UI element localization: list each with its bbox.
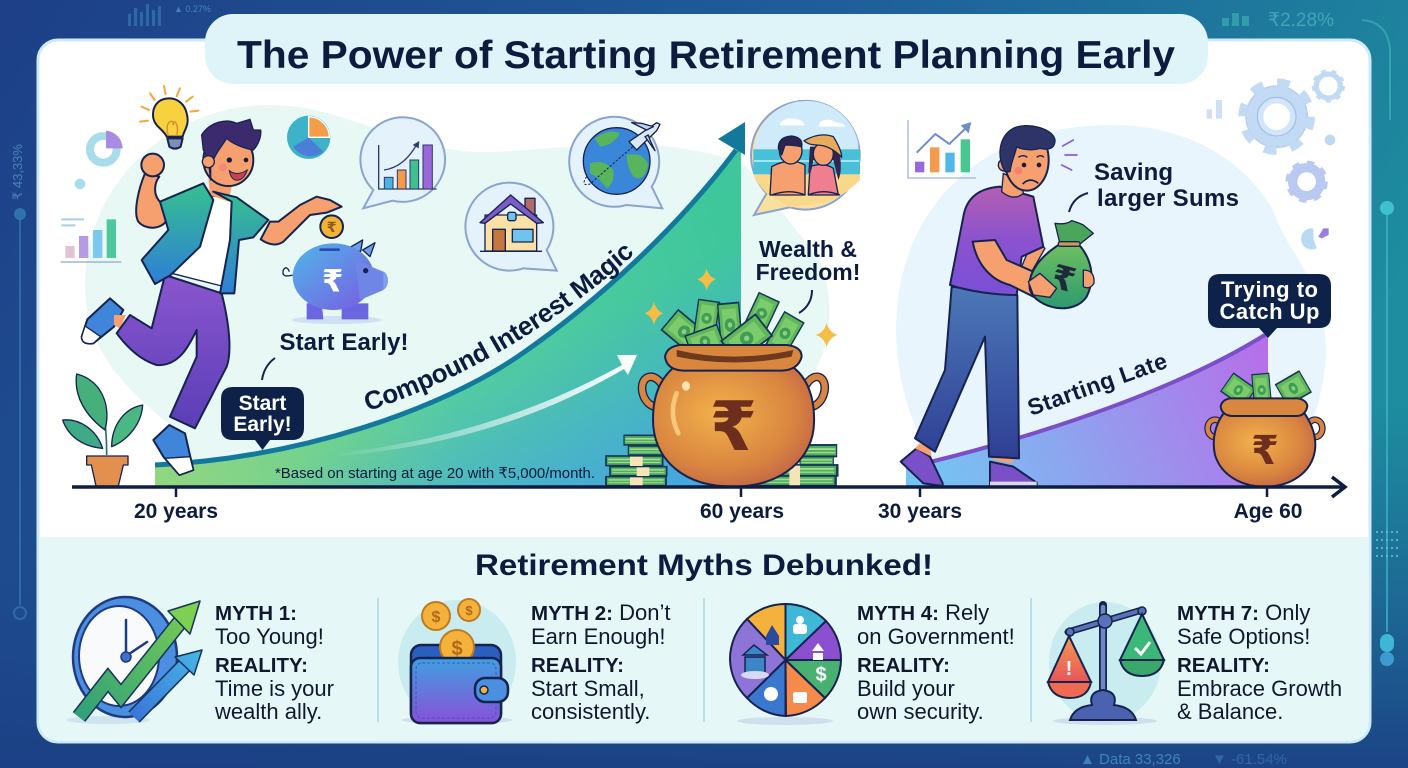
text: myth 2: consistently. [531, 699, 650, 724]
head [203, 134, 253, 186]
speech bubble: house [465, 183, 557, 271]
decorative left rail [10, 144, 26, 619]
callout: start early box: Early! [233, 413, 292, 436]
myth 2 [398, 599, 670, 724]
text: myth 7: REALITY: [1177, 654, 1270, 677]
money pot [638, 293, 829, 487]
title pill: The Power of Starting Retirement Planning Early [237, 34, 1175, 77]
myth 4 [730, 600, 1015, 725]
early growth chart area [155, 122, 745, 487]
text: myth 1: MYTH 1: [215, 602, 297, 625]
neck [1002, 173, 1023, 197]
speech bubble: growth chart [360, 117, 445, 208]
callout: wealth and freedom: Freedom! [756, 259, 860, 285]
far arm raised [136, 173, 167, 228]
myth 1 [66, 597, 334, 724]
late growth chart area [906, 333, 1268, 487]
coin [320, 215, 343, 238]
icon: plant [63, 374, 143, 486]
footnote: *Based on starting at age 20 with ₹5,000/month. [275, 465, 595, 482]
text: myth 7: & Balance. [1177, 699, 1283, 724]
label: saving larger sums [1069, 159, 1239, 212]
callout: wealth and freedom: Wealth & [759, 236, 857, 262]
callout: trying to catch up [1208, 274, 1331, 338]
myths heading: Retirement Myths Debunked! [475, 549, 933, 582]
icon: wallet and coins [398, 599, 516, 724]
text: myth 4 [857, 600, 1015, 724]
character: worried older man [901, 126, 1094, 486]
text: myth 7: Embrace Growth [1177, 676, 1342, 701]
open shirt left [142, 183, 213, 284]
reaching arm [261, 197, 342, 245]
decorative right rail [1376, 201, 1398, 666]
background blob: early [85, 105, 830, 487]
small pot: ₹ [1251, 429, 1279, 473]
label: start early [262, 329, 408, 380]
text: myth 1: wealth ally. [214, 699, 322, 724]
icon: donut [75, 131, 123, 189]
axis labels [134, 500, 1302, 523]
icon: light bulb [140, 86, 198, 149]
icon: pie wheel [730, 604, 841, 725]
text: myth 1 [214, 602, 334, 724]
text: myth 1: Time is your [215, 676, 334, 701]
speech bubble: globe and plane [569, 117, 662, 208]
money bag [1028, 221, 1094, 308]
decorative finance ticker: top right [1222, 10, 1390, 120]
curve arrowhead [718, 122, 745, 155]
small pot [1208, 371, 1322, 487]
decorative finance ticker: top left: ▲ 0.27% [174, 4, 211, 14]
axis labels: 20 years [134, 500, 218, 523]
text: myth 4: Build your [857, 676, 955, 701]
text: myth 7: MYTH 7: Only [1177, 600, 1310, 625]
open shirt right [213, 192, 268, 293]
text: myth 7: Safe Options! [1177, 624, 1310, 649]
decorative data ticker: bottom: ▲ Data 33,326 [1080, 751, 1181, 768]
decorative left rail: ₹ 43,33% [10, 144, 25, 200]
icon: wallet and coins: $ [451, 638, 463, 660]
panel: retirement myths [40, 537, 1368, 740]
axis labels: Age 60 [1234, 500, 1302, 523]
speech bubbles, pot, freedom: middle zoom coordinates [465, 101, 860, 487]
curve label: starting late: Starting Late [1024, 347, 1170, 421]
neck [208, 177, 232, 202]
decorative data ticker: bottom [1080, 751, 1287, 768]
compound curve line [155, 150, 736, 465]
illustration group: left side, zoom coordinates [61, 86, 445, 486]
icon: gears [1207, 71, 1343, 250]
head [1005, 129, 1049, 191]
background blob: late [896, 125, 1326, 487]
shoe front [153, 425, 193, 475]
text: myth 2: MYTH 2: Don’t [531, 600, 670, 625]
decorative finance ticker: top left [128, 4, 211, 26]
dividers [378, 598, 1031, 722]
label: saving larger sums: Saving [1094, 159, 1173, 186]
icon: mini bars [61, 219, 121, 262]
text: myth 1: REALITY: [215, 654, 308, 677]
text: myth 4: REALITY: [857, 654, 950, 677]
shoes [901, 448, 943, 486]
label: saving larger sums: larger Sums [1097, 185, 1239, 212]
text: myth 2: Start Small, [531, 676, 645, 701]
sparkles [645, 268, 837, 347]
text: myth 7 [1177, 600, 1342, 724]
curve label: compound interest magic: Compound Interest Magic [365, 246, 632, 409]
decorative finance ticker: top right: ₹2.28% [1268, 10, 1334, 31]
character: excited young man [82, 119, 343, 475]
label: start early: Start Early! [280, 329, 408, 356]
money bag: ₹ [1047, 259, 1079, 300]
text: myth 2: REALITY: [531, 654, 624, 677]
white growth arrow [340, 355, 637, 456]
shoe raised [82, 298, 123, 344]
white tee [172, 195, 233, 286]
decorative data ticker: bottom: ▼ -61.54% [1212, 751, 1287, 768]
bills in pot [662, 293, 804, 362]
icon: piggy bank: ₹ [322, 265, 343, 299]
speech bubble: beach couple [751, 101, 860, 215]
text: myth 4: on Government! [857, 624, 1015, 649]
text: myth 2 [531, 600, 670, 724]
icon: piggy bank [283, 240, 388, 324]
late side illustrations, zoom coordinates [901, 71, 1343, 487]
icon: line and bars chart [908, 120, 976, 178]
pants [117, 275, 229, 428]
callout: wealth and freedom [756, 236, 860, 313]
icon: clock and arrows [66, 597, 202, 724]
title pill [205, 14, 1208, 84]
icon: wallet and coins: $ [432, 609, 441, 626]
near arm [973, 240, 1057, 298]
character: excited young man: ₹ [327, 219, 337, 235]
jeans [915, 287, 1019, 458]
icon: wallet and coins: $ [465, 603, 473, 618]
tee [950, 187, 1043, 295]
callout: trying to catch up: Trying to [1221, 277, 1318, 302]
axis labels: 30 years [878, 500, 962, 523]
myth 7 [1048, 600, 1342, 725]
cash stacks [606, 435, 837, 486]
money pot: ₹ [710, 389, 757, 465]
text: myth 1: Too Young! [215, 624, 324, 649]
timeline axis [72, 477, 1345, 523]
icon: floating pie [287, 116, 330, 159]
icon: balance scale: ! [1066, 658, 1072, 680]
axis labels: 60 years [700, 500, 784, 523]
icon: balance scale [1048, 602, 1164, 725]
text: myth 4: MYTH 4: Rely [857, 600, 989, 625]
callout: start early box: Start [239, 392, 286, 415]
text: myth 2: Earn Enough! [531, 624, 666, 649]
text: myth 4: own security. [857, 699, 984, 724]
pot handles [638, 374, 829, 410]
icon: pie wheel: $ [815, 664, 827, 686]
far arm [1022, 238, 1045, 272]
callout: trying to catch up: Catch Up [1220, 299, 1320, 324]
small pot handles [1208, 420, 1322, 437]
callout: start early box [221, 387, 304, 450]
